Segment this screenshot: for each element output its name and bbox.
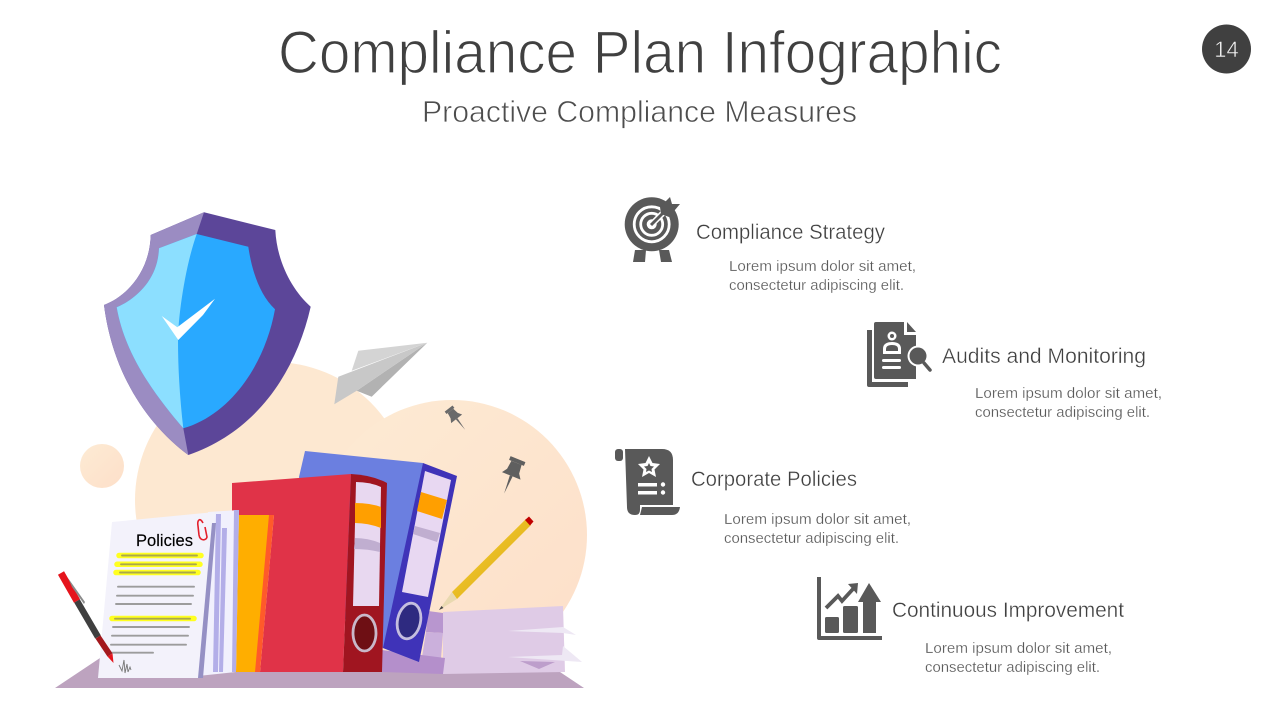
body text: consectetur adipiscing elit.: [925, 660, 1100, 676]
body text: [975, 386, 1162, 421]
heading: Audits and Monitoring: [942, 344, 1146, 368]
blue binder: [299, 451, 457, 662]
item: compliance strategy: [625, 197, 916, 294]
push pin large: [495, 455, 527, 497]
title: Compliance Plan Infographic: [278, 19, 1002, 86]
illustration: compliance desk scene: [55, 212, 587, 688]
heading: Compliance Strategy: [696, 220, 885, 244]
body text: Lorem ipsum dolor sit amet,: [724, 512, 911, 528]
policies label: Policies: [136, 532, 193, 550]
item: audits and monitoring: [867, 322, 1162, 421]
red pen: [61, 573, 114, 663]
body text: consectetur adipiscing elit.: [724, 531, 899, 547]
paper stack: [382, 606, 582, 674]
paper plane: [334, 343, 427, 404]
icon: target with arrow: [625, 197, 680, 262]
body text: Lorem ipsum dolor sit amet,: [729, 259, 916, 275]
body text: [729, 259, 916, 294]
heading: Corporate Policies: [691, 467, 857, 491]
body text: [724, 512, 911, 547]
icon: growth chart: [817, 577, 882, 640]
yellow folder: [236, 515, 274, 672]
item: corporate policies: [615, 449, 911, 547]
desk surface: [55, 658, 584, 688]
paper clip: [198, 520, 207, 540]
subtitle: Proactive Compliance Measures: [422, 94, 857, 129]
signature: [119, 660, 131, 673]
body text: Lorem ipsum dolor sit amet,: [925, 641, 1112, 657]
push pin small: [443, 404, 471, 434]
shield with check mark: [104, 212, 311, 455]
red binder: [232, 474, 387, 672]
body text: [925, 641, 1112, 676]
body text: consectetur adipiscing elit.: [729, 278, 904, 294]
heading: Continuous Improvement: [892, 598, 1124, 622]
body text: Lorem ipsum dolor sit amet,: [975, 386, 1162, 402]
page number badge: 14: [1214, 37, 1239, 62]
icon: document with magnifier: [867, 322, 930, 387]
page number badge: [1202, 24, 1251, 74]
item: continuous improvement: [817, 577, 1124, 676]
background circles: [80, 362, 587, 670]
pencil: [439, 516, 534, 610]
highlighted text lines: [111, 556, 201, 653]
policies document stack: [98, 510, 239, 678]
icon: scroll with star: [615, 449, 680, 515]
body text: consectetur adipiscing elit.: [975, 405, 1150, 421]
